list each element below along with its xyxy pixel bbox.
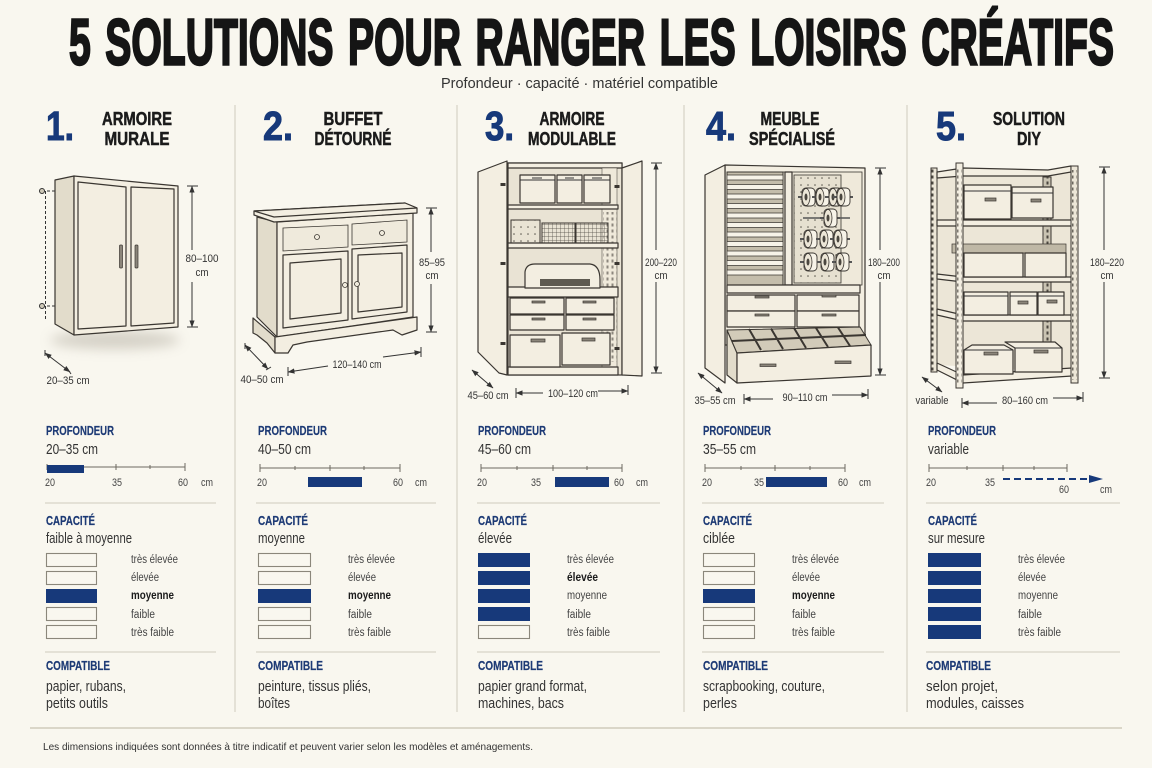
- dimensions: meuble spécialisé: 180–200: [868, 257, 900, 269]
- dimensions: armoire modulable: cm: [654, 270, 668, 282]
- compatible: buffet détourné: boîtes: [258, 696, 290, 712]
- capacity gauge: sur mesure: moyenne: [1018, 590, 1058, 602]
- capacity gauge: faible à moyenne: élevée: [131, 572, 159, 584]
- capacity gauge: ciblée: moyenne: [792, 590, 835, 602]
- dimensions: buffet détourné: 85–95: [419, 257, 445, 269]
- dimensions: buffet détourné: 40–50 cm: [240, 374, 284, 386]
- capacity gauge: ciblée: très faible: [792, 627, 835, 639]
- compatible: meuble spécialisé: COMPATIBLE: [703, 659, 768, 673]
- capacity gauge: moyenne: moyenne: [348, 590, 391, 602]
- heading: buffet détourné: DÉTOURNÉ: [314, 128, 392, 149]
- capacity gauge: sur mesure: [928, 513, 1065, 639]
- depth scale: 45–60 cm: 20: [477, 477, 487, 489]
- compatible: solution DIY: [926, 659, 1024, 712]
- dimensions: buffet détourné: [240, 208, 445, 386]
- dimensions: armoire modulable: [468, 163, 677, 402]
- depth scale: 40–50 cm: 20: [257, 477, 267, 489]
- compatible: armoire modulable: COMPATIBLE: [478, 659, 543, 673]
- capacity gauge: élevée: élevée: [567, 572, 598, 584]
- dimensions: armoire murale: 80–100: [186, 253, 218, 265]
- capacity gauge: sur mesure: faible: [1018, 609, 1042, 621]
- capacity gauge: ciblée: ciblée: [703, 531, 735, 547]
- capacity gauge: moyenne: [258, 513, 395, 639]
- capacity gauge: élevée: [478, 513, 614, 639]
- panel: 3 armoire modulable: [468, 103, 677, 712]
- depth scale: 35–55 cm: [702, 424, 871, 489]
- depth scale: 40–50 cm: PROFONDEUR: [258, 424, 327, 438]
- heading: solution DIY: SOLUTION: [993, 109, 1065, 129]
- depth scale: 40–50 cm: 60: [393, 477, 403, 489]
- depth scale: 45–60 cm: 60: [614, 477, 624, 489]
- depth scale: 35–55 cm: 60: [838, 477, 848, 489]
- depth scale: variable: PROFONDEUR: [928, 424, 996, 438]
- compatible: solution DIY: COMPATIBLE: [926, 659, 991, 673]
- compatible: meuble spécialisé: [703, 659, 825, 712]
- capacity gauge: ciblée: faible: [792, 609, 816, 621]
- panel: 2 buffet détourné: [240, 103, 445, 712]
- panel: 4 meuble spécialisé: [694, 103, 900, 712]
- depth scale: 45–60 cm: cm: [636, 477, 648, 489]
- capacity gauge: ciblée: très élevée: [792, 554, 839, 566]
- depth scale: 40–50 cm: [257, 424, 427, 489]
- heading: armoire modulable: ARMOIRE: [540, 109, 604, 129]
- compatible: solution DIY: modules, caisses: [926, 696, 1024, 712]
- illustration: sideboard: [253, 203, 417, 353]
- dimensions: solution DIY: cm: [1100, 270, 1114, 282]
- heading: meuble spécialisé: [706, 103, 835, 149]
- capacity gauge: sur mesure: élevée: [1018, 572, 1046, 584]
- heading: meuble spécialisé: MEUBLE: [760, 109, 820, 129]
- depth scale: variable: [926, 424, 1112, 496]
- dimensions: armoire murale: 20–35 cm: [46, 375, 90, 387]
- dimensions: buffet détourné: cm: [426, 270, 438, 282]
- dimensions: armoire modulable: 200–220: [645, 257, 677, 269]
- capacity gauge: moyenne: faible: [348, 609, 372, 621]
- compatible: buffet détourné: peinture, tissus pliés,: [258, 679, 371, 695]
- dimensions: meuble spécialisé: [694, 168, 900, 407]
- capacity gauge: moyenne: CAPACITÉ: [258, 513, 308, 528]
- compatible: armoire modulable: [478, 659, 587, 712]
- depth scale: 45–60 cm: 35: [531, 477, 541, 489]
- heading: buffet détourné: BUFFET: [324, 109, 382, 129]
- capacity gauge: ciblée: élevée: [792, 572, 820, 584]
- compatible: meuble spécialisé: scrapbooking, couture,: [703, 679, 825, 695]
- capacity gauge: sur mesure: très élevée: [1018, 554, 1065, 566]
- heading: armoire modulable: [485, 103, 616, 149]
- dimensions: solution DIY: 80–160 cm: [1002, 395, 1048, 407]
- capacity gauge: faible à moyenne: faible à moyenne: [46, 531, 132, 547]
- illustration: specialised unit: [705, 165, 871, 383]
- compatible: solution DIY: selon projet,: [926, 679, 998, 695]
- depth scale: 35–55 cm: 35: [754, 477, 764, 489]
- compatible: armoire modulable: machines, bacs: [478, 696, 564, 712]
- heading: buffet détourné: 2.: [263, 103, 293, 149]
- compatible: armoire modulable: papier grand format,: [478, 679, 587, 695]
- capacity gauge: ciblée: CAPACITÉ: [703, 513, 752, 528]
- capacity gauge: élevée: très élevée: [567, 554, 614, 566]
- dimensions: meuble spécialisé: cm: [878, 270, 890, 282]
- heading: solution DIY: [936, 103, 1065, 149]
- capacity gauge: moyenne: moyenne: [258, 531, 305, 547]
- dimensions: solution DIY: [916, 167, 1124, 408]
- panel: 5 solution DIY: [916, 103, 1124, 712]
- capacity gauge: sur mesure: CAPACITÉ: [928, 513, 977, 528]
- compatible: armoire murale: [46, 659, 126, 712]
- heading: solution DIY: DIY: [1017, 129, 1041, 149]
- depth scale: 45–60 cm: [477, 424, 648, 489]
- dimensions: solution DIY: variable: [916, 395, 948, 407]
- capacity gauge: élevée: très faible: [567, 627, 610, 639]
- heading: armoire modulable: MODULABLE: [528, 129, 616, 149]
- depth scale: 20–35 cm: 35: [112, 477, 122, 489]
- capacity gauge: élevée: élevée: [478, 531, 512, 547]
- heading: armoire modulable: 3.: [485, 103, 514, 149]
- subtitle: Profondeur · capacité · matériel compatible: [441, 76, 718, 92]
- illustration: modular cabinet: [478, 161, 642, 376]
- dimensions: armoire modulable: 100–120 cm: [548, 388, 598, 400]
- depth scale: 35–55 cm: PROFONDEUR: [703, 424, 771, 438]
- compatible: meuble spécialisé: perles: [703, 696, 737, 712]
- footnote: Les dimensions indiquées sont données à titre indicatif et peuvent varier selon les modèles et aménagements.: [43, 741, 533, 753]
- heading: armoire murale: ARMOIRE: [102, 109, 172, 129]
- capacity gauge: élevée: faible: [567, 609, 591, 621]
- dimensions: meuble spécialisé: 90–110 cm: [782, 392, 828, 404]
- capacity gauge: élevée: CAPACITÉ: [478, 513, 527, 528]
- capacity gauge: élevée: moyenne: [567, 590, 607, 602]
- capacity gauge: faible à moyenne: faible: [131, 609, 155, 621]
- heading: armoire murale: 1.: [46, 103, 74, 149]
- depth scale: variable: 20: [926, 477, 936, 489]
- dimensions: solution DIY: 180–220: [1090, 257, 1124, 269]
- capacity gauge: moyenne: très élevée: [348, 554, 395, 566]
- depth scale: variable: cm: [1100, 484, 1112, 496]
- depth scale: 45–60 cm: 45–60 cm: [478, 442, 531, 458]
- heading: armoire murale: MURALE: [104, 129, 170, 149]
- depth scale: 20–35 cm: [45, 424, 213, 489]
- heading: meuble spécialisé: 4.: [706, 103, 736, 149]
- heading: meuble spécialisé: SPÉCIALISÉ: [749, 128, 835, 149]
- dimensions: buffet détourné: 120–140 cm: [332, 359, 382, 371]
- compatible: armoire murale: COMPATIBLE: [46, 659, 110, 673]
- capacity gauge: moyenne: très faible: [348, 627, 391, 639]
- depth scale: 20–35 cm: 20–35 cm: [46, 442, 98, 458]
- depth scale: 40–50 cm: 40–50 cm: [258, 442, 311, 458]
- compatible: buffet détourné: COMPATIBLE: [258, 659, 323, 673]
- heading: buffet détourné: [263, 103, 392, 149]
- depth scale: variable: 60: [1059, 484, 1069, 496]
- heading: armoire murale: [46, 103, 172, 149]
- capacity gauge: faible à moyenne: [46, 513, 178, 639]
- capacity gauge: moyenne: élevée: [348, 572, 376, 584]
- depth scale: 40–50 cm: cm: [415, 477, 427, 489]
- dimensions: armoire modulable: 45–60 cm: [468, 390, 508, 402]
- depth scale: 35–55 cm: 20: [702, 477, 712, 489]
- capacity gauge: ciblée: [703, 513, 839, 639]
- depth scale: 35–55 cm: 35–55 cm: [703, 442, 756, 458]
- capacity gauge: faible à moyenne: moyenne: [131, 590, 174, 602]
- capacity gauge: sur mesure: très faible: [1018, 627, 1061, 639]
- depth scale: 45–60 cm: PROFONDEUR: [478, 424, 546, 438]
- capacity gauge: sur mesure: sur mesure: [928, 531, 985, 547]
- depth scale: 20–35 cm: PROFONDEUR: [46, 424, 114, 438]
- compatible: buffet détourné: [258, 659, 371, 712]
- compatible: armoire murale: petits outils: [46, 696, 108, 712]
- depth scale: 20–35 cm: 20: [45, 477, 55, 489]
- depth scale: 20–35 cm: cm: [201, 477, 213, 489]
- dimensions: armoire murale: cm: [196, 267, 208, 279]
- illustration: DIY shelving: [931, 163, 1078, 388]
- compatible: armoire murale: papier, rubans,: [46, 679, 126, 695]
- capacity gauge: faible à moyenne: très faible: [131, 627, 174, 639]
- capacity gauge: faible à moyenne: très élevée: [131, 554, 178, 566]
- dimensions: armoire murale: [45, 186, 218, 387]
- illustration: wall cabinet: [40, 176, 180, 349]
- dimensions: meuble spécialisé: 35–55 cm: [694, 395, 736, 407]
- depth scale: 20–35 cm: 60: [178, 477, 188, 489]
- depth scale: 35–55 cm: cm: [859, 477, 871, 489]
- depth scale: variable: variable: [928, 442, 969, 458]
- depth scale: variable: 35: [985, 477, 995, 489]
- panel: 1 armoire murale: [40, 103, 218, 712]
- capacity gauge: faible à moyenne: CAPACITÉ: [46, 513, 95, 528]
- heading: solution DIY: 5.: [936, 103, 966, 149]
